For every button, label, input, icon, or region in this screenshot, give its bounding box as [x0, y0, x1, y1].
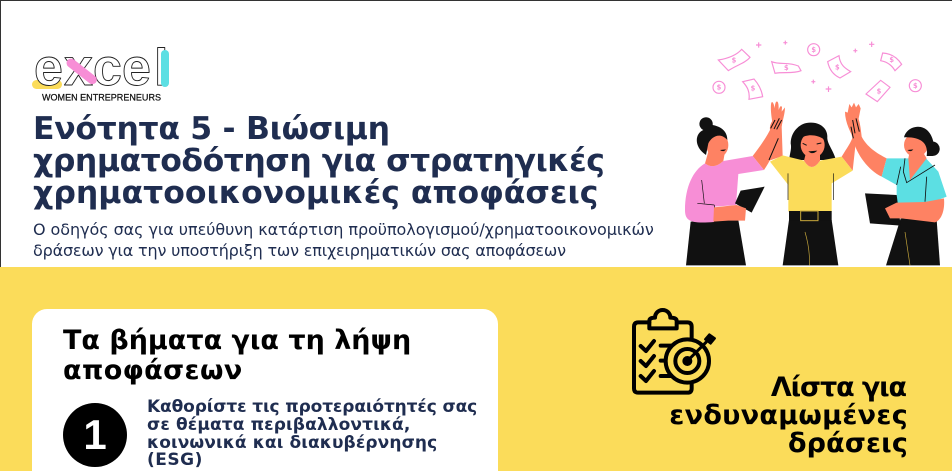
step 1 text: (ESG)	[147, 450, 203, 470]
money icons: $	[835, 63, 840, 71]
illustration: three women high-fiving under money	[685, 40, 947, 266]
money icons: $	[751, 85, 756, 93]
subtitle: Ο οδηγός σας για υπεύθυνη κατάρτιση προϋπολογισμού/χρηματοοικονομικών	[33, 220, 654, 238]
steps heading: Τα βήματα για τη λήψη	[63, 325, 411, 356]
icon: checklist clipboard with target	[632, 308, 716, 395]
title: Ενότητα 5 - Βιώσιμη	[33, 111, 390, 147]
money icons	[713, 41, 921, 102]
checklist heading	[669, 372, 908, 459]
logo: excel women entrepreneurs: WOMEN ENTREPRENEURS	[42, 92, 161, 102]
yellow lower background	[0, 267, 952, 471]
title: χρηματοοικονομικές αποφάσεις	[33, 175, 598, 211]
money icons: $	[784, 64, 789, 72]
woman right	[850, 115, 947, 265]
subtitle	[33, 220, 654, 260]
steps heading: αποφάσεων	[63, 354, 243, 386]
step 1 text: σε θέματα περιβαλλοντικά,	[147, 415, 410, 435]
money icons: $	[913, 82, 918, 90]
money icons: $	[877, 88, 882, 96]
woman center	[769, 101, 861, 265]
checklist heading: ενδυναμωμένες	[669, 400, 908, 431]
step 1 number badge: 1	[83, 411, 107, 458]
checklist heading: δράσεις	[788, 428, 908, 459]
title	[33, 111, 604, 211]
step 1 text: Καθορίστε τις προτεραιότητές σας	[147, 397, 477, 417]
woman left	[685, 115, 782, 265]
step 1 text	[147, 397, 477, 470]
panel: decision steps	[32, 309, 498, 471]
money icons: $	[889, 56, 894, 64]
checklist heading: Λίστα για	[771, 372, 906, 403]
step 1 text: κοινωνικά και διακυβέρνησης	[147, 433, 437, 453]
money icons: $	[732, 57, 737, 65]
title: χρηματοδότηση για στρατηγικές	[33, 143, 604, 179]
money icons: $	[717, 84, 722, 92]
money icons: $	[811, 46, 816, 54]
steps heading	[63, 325, 411, 386]
subtitle: δράσεων για την υποστήριξη των επιχειρηματικών σας αποφάσεων	[33, 241, 566, 260]
step 1 number badge	[63, 403, 127, 467]
